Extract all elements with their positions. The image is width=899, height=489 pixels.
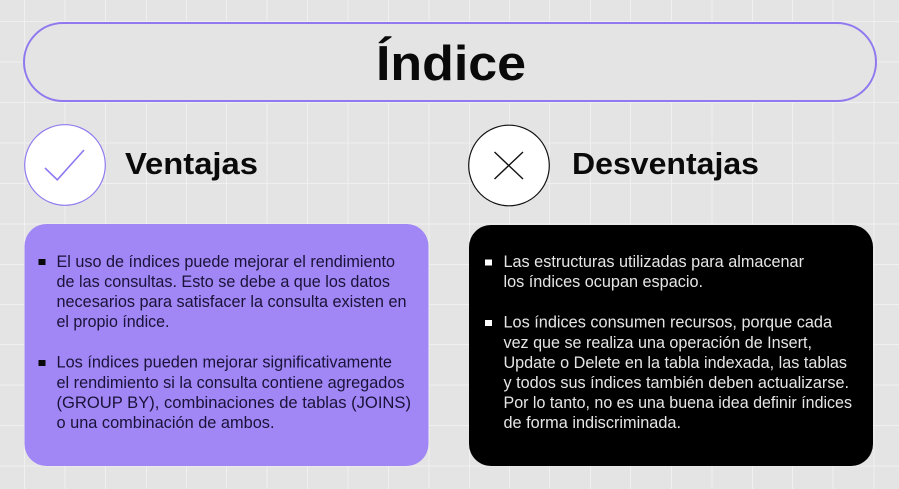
bullet: desventaja 1: los índices ocupan espacio. <box>504 273 703 291</box>
bullet: desventaja 2: vez que se realiza una operación de Insert, <box>504 334 812 352</box>
icon: check mark circle <box>25 125 105 205</box>
bullet: ventaja 1: de las consultas. Esto se debe a que los datos <box>56 273 390 291</box>
bullet: desventaja 1: Las estructuras utilizadas para almacenar <box>504 253 805 271</box>
bullet: ventaja 2: (GROUP BY), combinaciones de tablas (JOINS) <box>56 394 411 412</box>
bullet: desventaja 2 <box>485 314 852 432</box>
bullet: desventaja 2: de forma indiscriminada. <box>504 414 681 432</box>
bullet: desventaja 2: Por lo tanto, no es una buena idea definir índices <box>504 394 852 412</box>
bullet: desventaja 2: y todos sus índices también deben actualizarse. <box>504 374 849 392</box>
bullet: ventaja 2: Los índices pueden mejorar significativamente <box>56 354 392 372</box>
bullet: ventaja 2: o una combinación de ambos. <box>56 414 274 432</box>
bullet: ventaja 2 <box>38 354 411 432</box>
icon: cross circle <box>469 125 549 206</box>
bullet: ventaja 2: el rendimiento si la consulta contiene agregados <box>56 374 404 392</box>
panel: desventajas <box>469 225 873 466</box>
bullet: ventaja 1: el propio índice. <box>56 313 170 331</box>
heading: Ventajas: Ventajas <box>125 147 258 181</box>
panel: ventajas <box>24 224 428 466</box>
bullet: desventaja 2: Update o Delete en la tabla indexada, las tablas <box>504 354 847 372</box>
bullet: desventaja 2: Los índices consumen recursos, porque cada <box>504 314 833 332</box>
bullet: ventaja 1: necesarios para satisfacer la consulta existen en <box>56 293 406 311</box>
title pill <box>24 23 876 101</box>
bullet: desventaja 1 <box>485 253 805 291</box>
title: Índice <box>376 37 526 91</box>
heading: Desventajas: Desventajas <box>572 147 759 181</box>
bullet: ventaja 1: El uso de índices puede mejorar el rendimiento <box>56 253 395 271</box>
bullet: ventaja 1 <box>38 253 406 331</box>
